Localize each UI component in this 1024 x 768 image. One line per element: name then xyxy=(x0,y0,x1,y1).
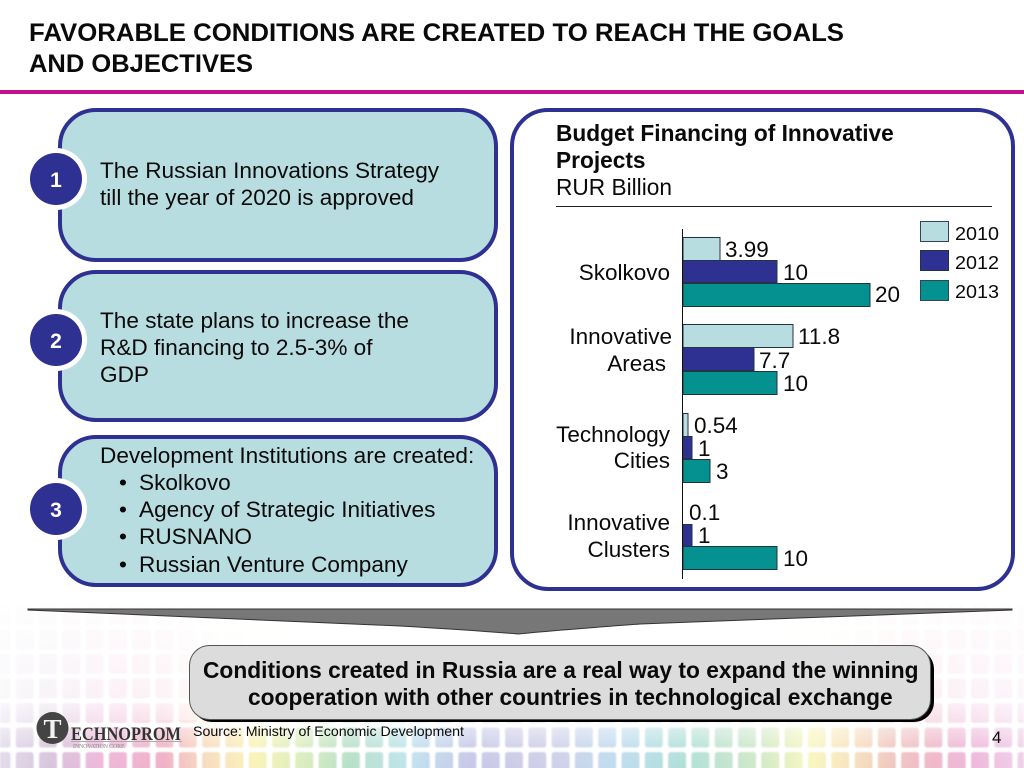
badge 1: 1 xyxy=(50,169,62,192)
legend xyxy=(920,222,999,302)
logo xyxy=(36,712,182,750)
value labels: 3 xyxy=(716,459,729,484)
panel 3 text: • xyxy=(119,497,127,522)
panel 3 text: Skolkovo xyxy=(139,470,231,495)
legend: 2012 xyxy=(955,252,999,273)
chart heading xyxy=(556,120,894,200)
category labels: Areas xyxy=(607,351,666,376)
panel 2 text: The state plans to increase the xyxy=(100,308,409,333)
panel: strategy approved xyxy=(25,110,496,260)
category labels: Skolkovo xyxy=(579,260,670,285)
badge 3 xyxy=(25,478,87,540)
badge 2 xyxy=(25,309,87,371)
badge 3: 3 xyxy=(50,499,62,522)
legend: 2013 xyxy=(955,281,999,302)
value labels: 10 xyxy=(783,260,808,285)
panel 1 text: The Russian Innovations Strategy xyxy=(100,158,440,183)
conclusion text: Conditions created in Russia are a real way to expand the winning xyxy=(203,657,919,683)
page number: 4 xyxy=(992,728,1001,747)
value labels: 7.7 xyxy=(759,348,790,373)
title: AND OBJECTIVES xyxy=(29,50,253,78)
chart heading: RUR Billion xyxy=(556,174,672,200)
panel 3 text: • xyxy=(119,470,127,495)
logo: INNOVATION CORP. xyxy=(73,744,126,750)
value labels: 1 xyxy=(698,523,711,548)
panel: budget chart xyxy=(512,110,1013,589)
value labels: 20 xyxy=(875,282,900,307)
value labels: 10 xyxy=(783,546,808,571)
value labels: 1 xyxy=(698,436,711,461)
funnel arrow xyxy=(28,609,1012,634)
panel 3 text: Russian Venture Company xyxy=(139,552,408,577)
logo: T xyxy=(43,714,62,744)
badge 2: 2 xyxy=(50,330,62,353)
category labels: Cities xyxy=(614,448,670,473)
panel 2 text: GDP xyxy=(100,362,149,387)
value labels xyxy=(689,237,900,571)
panel 3 text: • xyxy=(119,524,127,549)
category labels xyxy=(556,260,672,562)
logo: ECHNOPROM xyxy=(71,724,181,745)
category labels: Clusters xyxy=(587,537,670,562)
conclusion text xyxy=(203,657,919,710)
panel 3 text: • xyxy=(119,552,127,577)
panel 3 text xyxy=(100,443,474,577)
title rule xyxy=(0,90,1024,94)
category labels: Innovative xyxy=(569,324,672,349)
panel 3 text: RUSNANO xyxy=(139,524,252,549)
source note: Source: Ministry of Economic Development xyxy=(193,723,464,739)
legend: 2010 xyxy=(955,223,999,244)
category labels: Technology xyxy=(556,422,671,447)
panel 1 text xyxy=(100,158,440,210)
panel 3 text: Development Institutions are created: xyxy=(100,443,474,468)
panel 2 text: R&D financing to 2.5-3% of xyxy=(100,335,373,360)
badge 1 xyxy=(25,148,87,210)
value labels: 0.1 xyxy=(689,500,720,525)
category labels: Innovative xyxy=(567,510,670,535)
axis xyxy=(682,229,683,579)
panel 2 text xyxy=(100,308,409,387)
chart heading: Budget Financing of Innovative xyxy=(556,120,894,146)
conclusion text: cooperation with other countries in technological exchange xyxy=(248,684,893,710)
conclusion box xyxy=(190,646,934,722)
panel: R&D financing xyxy=(25,272,496,420)
chart heading: Projects xyxy=(556,147,646,173)
bar chart xyxy=(556,229,900,579)
heading rule xyxy=(556,206,992,207)
panel: development institutions xyxy=(25,437,496,585)
title: FAVORABLE CONDITIONS ARE CREATED TO REACH THE GOALS xyxy=(29,19,844,47)
title xyxy=(29,19,844,78)
value labels: 10 xyxy=(783,371,808,396)
panel 3 text: Agency of Strategic Initiatives xyxy=(139,497,435,522)
value labels: 3.99 xyxy=(725,237,769,262)
value labels: 0.54 xyxy=(694,413,738,438)
value labels: 11.8 xyxy=(798,324,840,349)
panel 1 text: till the year of 2020 is approved xyxy=(100,185,414,210)
